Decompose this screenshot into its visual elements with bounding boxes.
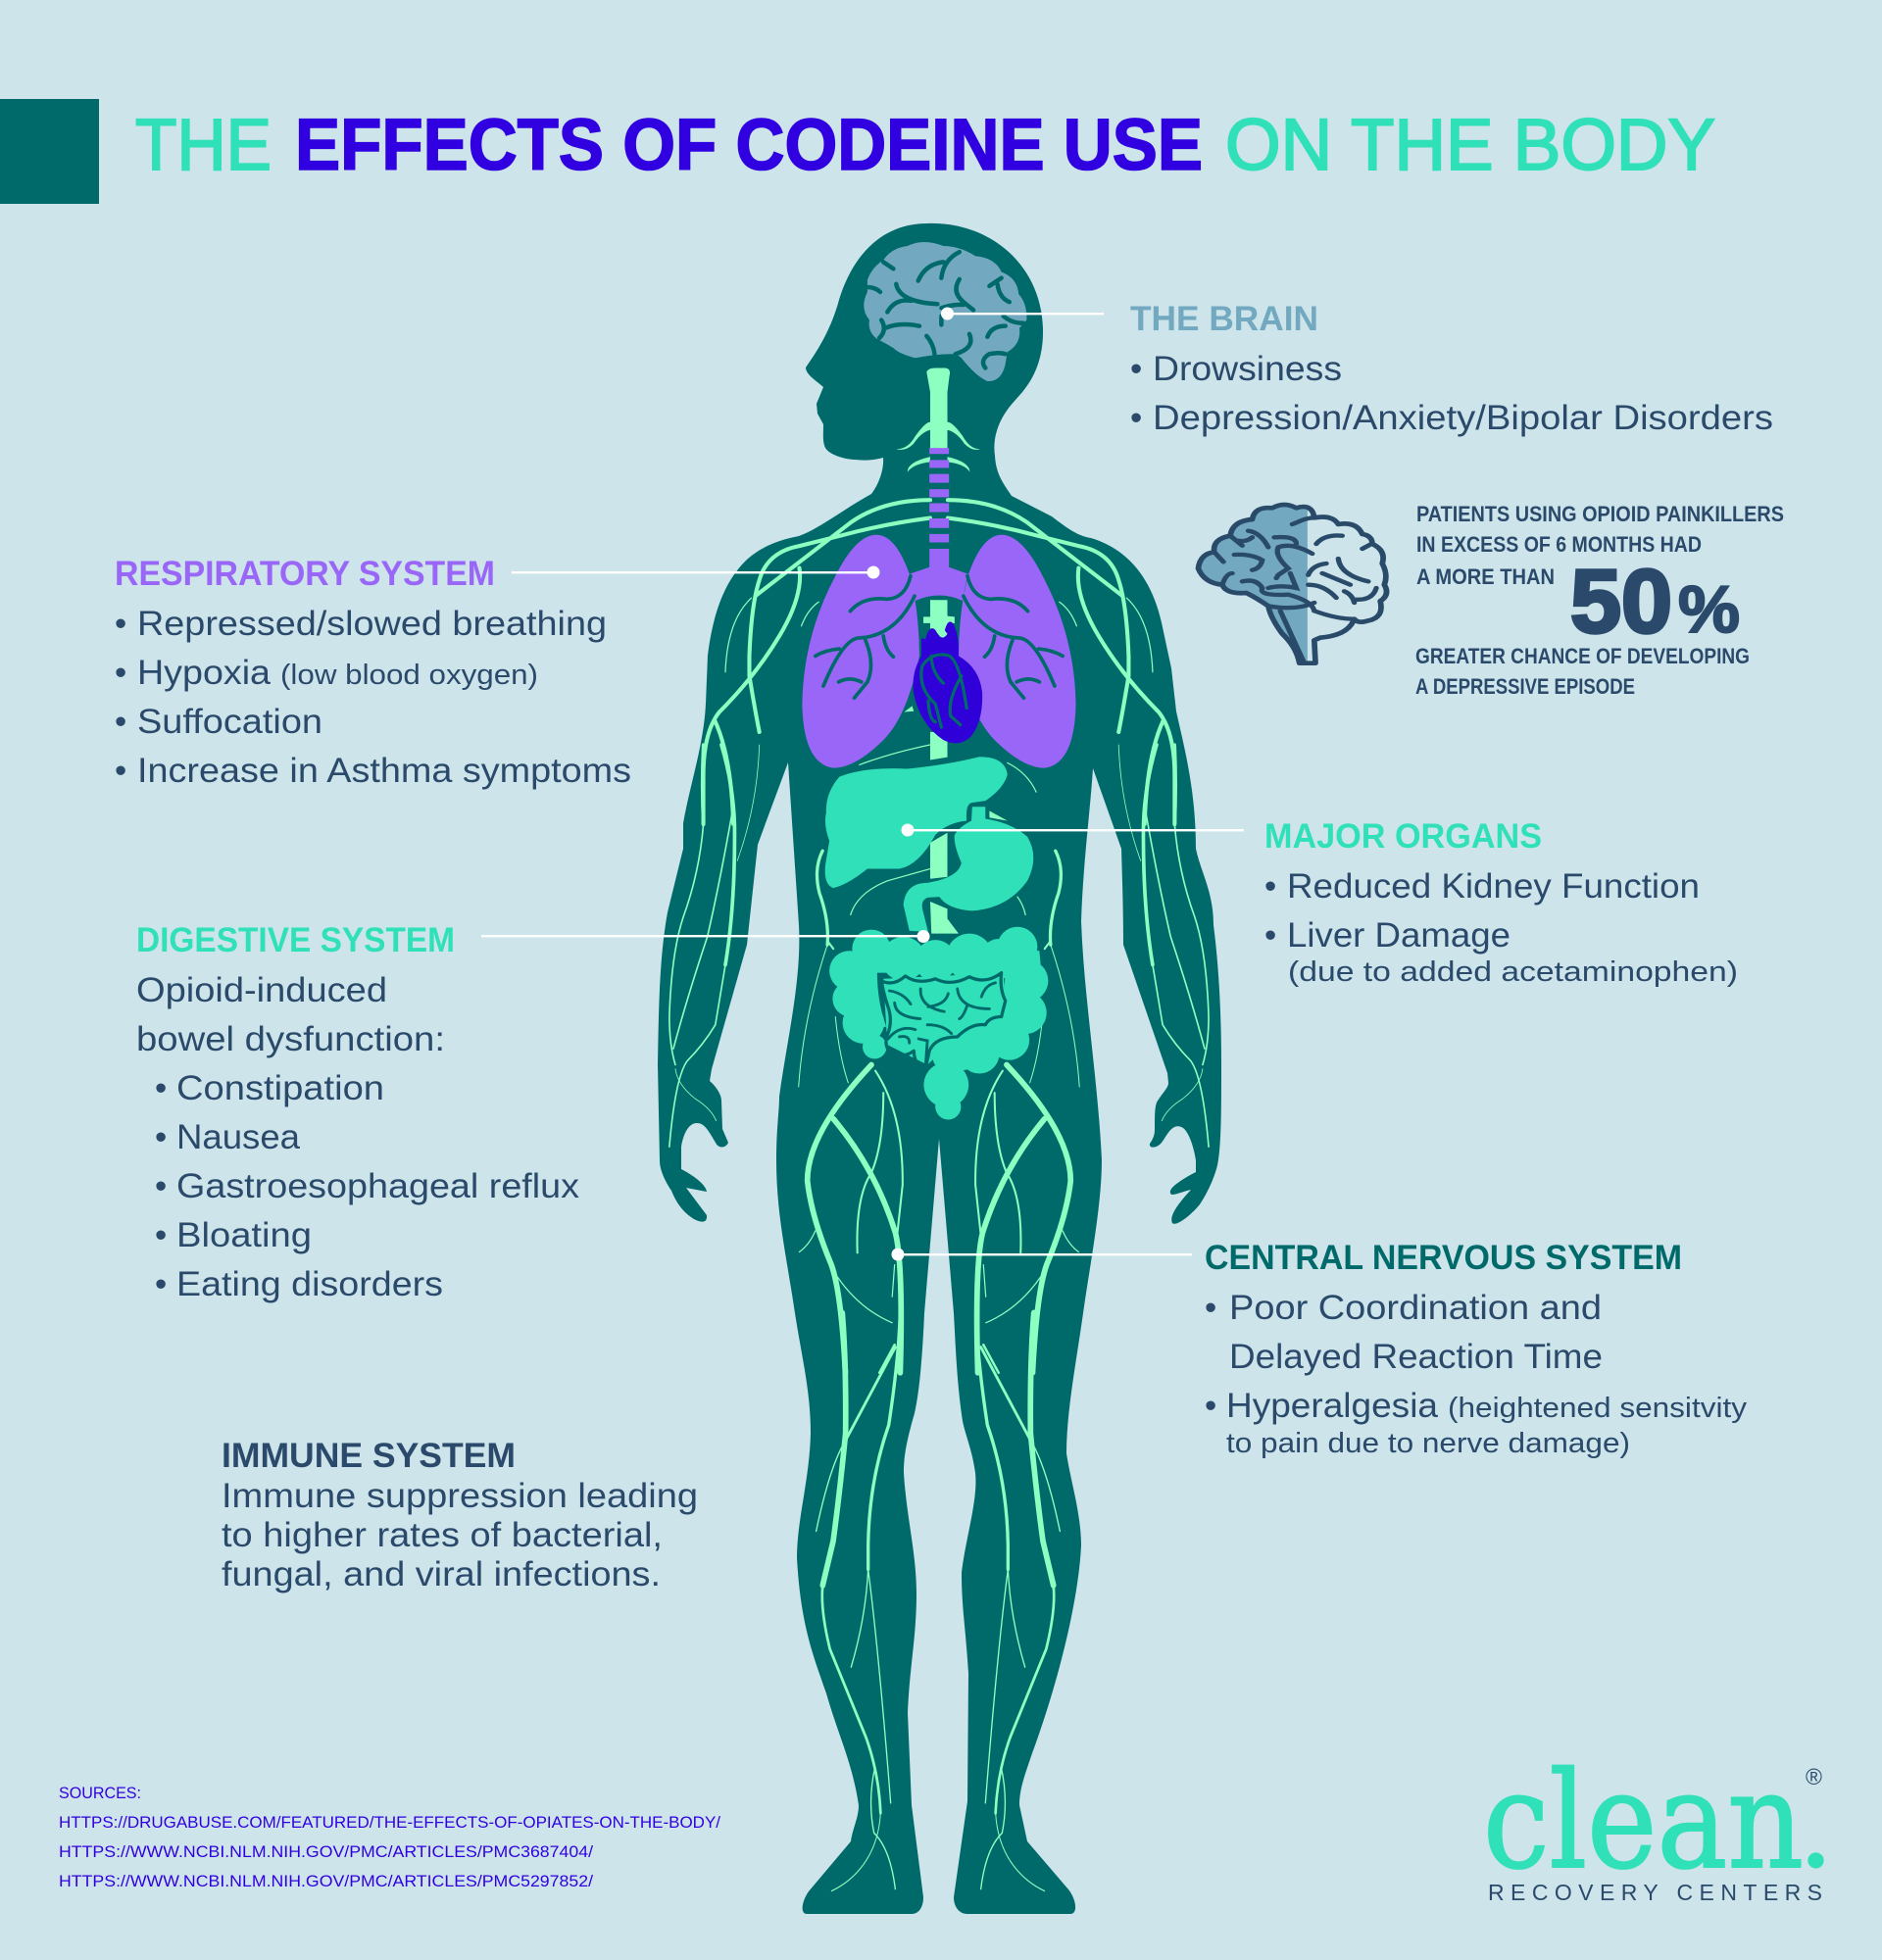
text block: central nervous system: CENTRAL NERVOUS SYSTEM (1205, 1239, 1682, 1277)
text block: immune system: IMMUNE SYSTEM (222, 1437, 516, 1475)
body silhouette (658, 223, 1221, 1914)
leader line: central nervous system (892, 1249, 1192, 1260)
text block: digestive system: bowel dysfunction: (136, 1020, 445, 1058)
text block: digestive system: Gastroesophageal reflux (176, 1167, 580, 1205)
nerves: spine and chest (704, 368, 1174, 824)
text block: central nervous system (1205, 1239, 1748, 1459)
text block: digestive system: • (155, 1216, 167, 1254)
text block: digestive system: Opioid-induced (136, 971, 387, 1009)
logo: clean recovery centers: clean (1483, 1744, 1804, 1899)
leader line: brain (941, 308, 1104, 319)
text block: major organs: • (1264, 867, 1276, 906)
text block: central nervous system: (heightened sensitvity (1448, 1393, 1748, 1424)
logo: clean recovery centers: ® (1806, 1764, 1822, 1789)
text block: central nervous system: • (1205, 1289, 1216, 1327)
callout: depression statistic: A MORE THAN (1416, 564, 1555, 589)
sources: HTTPS://DRUGABUSE.COM/FEATURED/THE-EFFECTS-OF-OPIATES-ON-THE-BODY/ (59, 1813, 720, 1832)
text block: digestive system: Constipation (176, 1069, 384, 1107)
callout: depression statistic: 50 (1570, 552, 1672, 652)
heart (913, 621, 982, 743)
title: ON THE BODY (1225, 104, 1715, 185)
text block: major organs: Reduced Kidney Function (1287, 867, 1700, 906)
sources (59, 1784, 720, 1890)
callout: depression statistic: IN EXCESS OF 6 MONTHS HAD (1416, 532, 1702, 557)
title accent square (0, 99, 99, 204)
title (135, 104, 1715, 185)
title: THE (135, 104, 272, 185)
text block: respiratory system: • (115, 605, 126, 643)
text block: the brain: • (1130, 350, 1142, 388)
text block: digestive system: Eating disorders (176, 1265, 443, 1303)
text block: digestive system: • (155, 1167, 167, 1205)
text block: major organs: (due to added acetaminophen) (1288, 956, 1738, 988)
callout: depression statistic: PATIENTS USING OPIOID PAINKILLERS (1416, 502, 1784, 526)
text block: respiratory system (115, 555, 631, 790)
text block: immune system (222, 1437, 698, 1593)
text block: central nervous system: Delayed Reaction Time (1229, 1338, 1603, 1376)
text block: digestive system: • (155, 1265, 167, 1303)
leader line: respiratory (512, 566, 880, 578)
text block: digestive system (136, 921, 580, 1303)
text block: immune system: fungal, and viral infections. (222, 1555, 661, 1593)
text block: digestive system: Bloating (176, 1216, 312, 1254)
text block: respiratory system: (low blood oxygen) (280, 660, 538, 691)
callout: depression statistic: GREATER CHANCE OF DEVELOPING (1415, 644, 1750, 668)
text block: digestive system: Nausea (176, 1118, 301, 1156)
text block: respiratory system: RESPIRATORY SYSTEM (115, 555, 495, 593)
text block: central nervous system: Poor Coordination and (1229, 1289, 1602, 1327)
callout: depression statistic: % (1678, 572, 1740, 647)
text block: the brain (1130, 300, 1773, 437)
text block: respiratory system: Suffocation (137, 703, 322, 741)
text block: major organs: • (1264, 916, 1276, 955)
text block: digestive system: • (155, 1069, 167, 1107)
text block: the brain: • (1130, 399, 1142, 437)
text block: respiratory system: • (115, 654, 126, 692)
text block: respiratory system: • (115, 703, 126, 741)
sources: HTTPS://WWW.NCBI.NLM.NIH.GOV/PMC/ARTICLES/PMC5297852/ (59, 1872, 593, 1890)
nerves: arms, abdomen and thighs (669, 745, 1209, 1373)
text block: central nervous system: • (1205, 1387, 1216, 1425)
lungs and trachea (802, 448, 1076, 768)
text block: major organs: MAJOR ORGANS (1264, 817, 1542, 856)
intestines (829, 927, 1048, 1119)
text block: major organs (1264, 817, 1738, 988)
text block: the brain: THE BRAIN (1130, 300, 1318, 338)
text block: respiratory system: Hypoxia (137, 654, 272, 692)
icon: brain half filled (1198, 505, 1387, 663)
text block: respiratory system: Repressed/slowed breathing (137, 605, 607, 643)
brain (864, 242, 1026, 381)
sources: SOURCES: (59, 1784, 141, 1802)
human body figure (658, 223, 1221, 1914)
text block: central nervous system: Hyperalgesia (1226, 1387, 1439, 1425)
text block: the brain: Drowsiness (1153, 350, 1342, 388)
text block: central nervous system: to pain due to nerve damage) (1226, 1428, 1630, 1459)
text block: digestive system: DIGESTIVE SYSTEM (136, 921, 455, 959)
nerves: lower legs (817, 1313, 1060, 1891)
text block: respiratory system: Increase in Asthma symptoms (137, 752, 631, 790)
callout: depression statistic: A DEPRESSIVE EPISODE (1415, 674, 1635, 699)
title: EFFECTS OF CODEINE USE (295, 104, 1203, 185)
text block: immune system: to higher rates of bacterial, (222, 1516, 663, 1554)
logo: clean recovery centers: . (1804, 1780, 1828, 1888)
text block: the brain: Depression/Anxiety/Bipolar Disorders (1153, 399, 1773, 437)
text block: respiratory system: • (115, 752, 126, 790)
liver and stomach (825, 757, 1033, 932)
leader line: major organs (902, 823, 1244, 837)
text block: immune system: Immune suppression leading (222, 1477, 698, 1515)
leader line: digestive (481, 930, 929, 943)
logo: clean recovery centers: RECOVERY CENTERS (1488, 1880, 1822, 1905)
text block: digestive system: • (155, 1118, 167, 1156)
text block: major organs: Liver Damage (1287, 916, 1511, 955)
callout: depression statistic (1415, 502, 1784, 699)
sources: HTTPS://WWW.NCBI.NLM.NIH.GOV/PMC/ARTICLES/PMC3687404/ (59, 1842, 593, 1861)
